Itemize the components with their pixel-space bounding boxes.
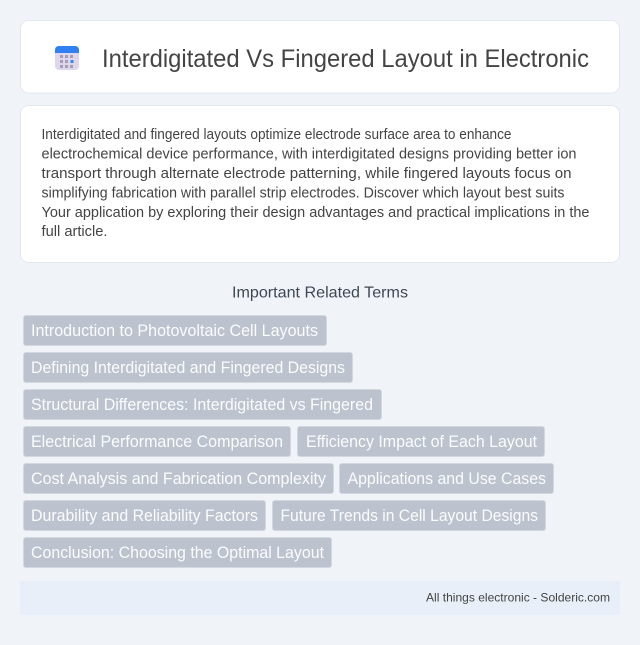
text block: summary paragraph: electrochemical device performance, with interdigitated designs providing better ion	[42, 146, 576, 162]
text block: summary paragraph: full article.	[42, 224, 108, 240]
tag: structural differences: Structural Differences: Interdigitated vs Fingered	[31, 396, 373, 414]
tag: electrical performance: Electrical Performance Comparison	[31, 433, 283, 451]
text block: summary paragraph: transport through alternate electrode patterning, while fingered layouts focus on	[42, 166, 572, 182]
tag: future trends: Future Trends in Cell Layout Designs	[280, 507, 538, 525]
tag: introduction	[24, 316, 326, 346]
text block: summary paragraph: Your application by exploring their design advantages and practical implications in the	[42, 205, 590, 221]
tag: efficiency impact: Efficiency Impact of Each Layout	[306, 433, 537, 451]
title: Interdigitated Vs Fingered Layout in Electronic	[102, 45, 589, 73]
tag: defining: Defining Interdigitated and Fingered Designs	[31, 359, 345, 377]
text block: summary paragraph: Interdigitated and fingered layouts optimize electrode surface area to enhance	[42, 127, 512, 143]
panel: summary card	[20, 106, 620, 262]
footer bar	[20, 581, 620, 615]
tag: conclusion: Conclusion: Choosing the Optimal Layout	[31, 544, 324, 562]
tag: cost analysis	[24, 464, 334, 494]
tag: electrical performance	[24, 426, 290, 456]
panel: title card	[20, 20, 620, 93]
tag: defining	[24, 352, 352, 382]
tag: durability	[24, 500, 266, 530]
tag list	[24, 316, 554, 568]
text block: summary paragraph: simplifying fabrication with parallel strip electrodes. Discover which layout best suits	[42, 186, 564, 202]
tag: introduction: Introduction to Photovoltaic Cell Layouts	[31, 322, 318, 340]
text block: summary paragraph	[42, 127, 590, 240]
tag: future trends	[272, 500, 546, 530]
tag: structural differences	[24, 390, 382, 420]
tag: durability: Durability and Reliability Factors	[31, 507, 258, 525]
footer credit: All things electronic - Solderic.com	[426, 590, 610, 604]
tag: conclusion	[24, 538, 332, 568]
tag: efficiency impact	[298, 426, 544, 456]
tag: applications: Applications and Use Cases	[348, 470, 546, 488]
heading: related terms: Important Related Terms	[232, 284, 408, 302]
tag: applications	[340, 464, 554, 494]
icon: calendar	[55, 46, 79, 70]
tag: cost analysis: Cost Analysis and Fabrication Complexity	[31, 470, 327, 488]
